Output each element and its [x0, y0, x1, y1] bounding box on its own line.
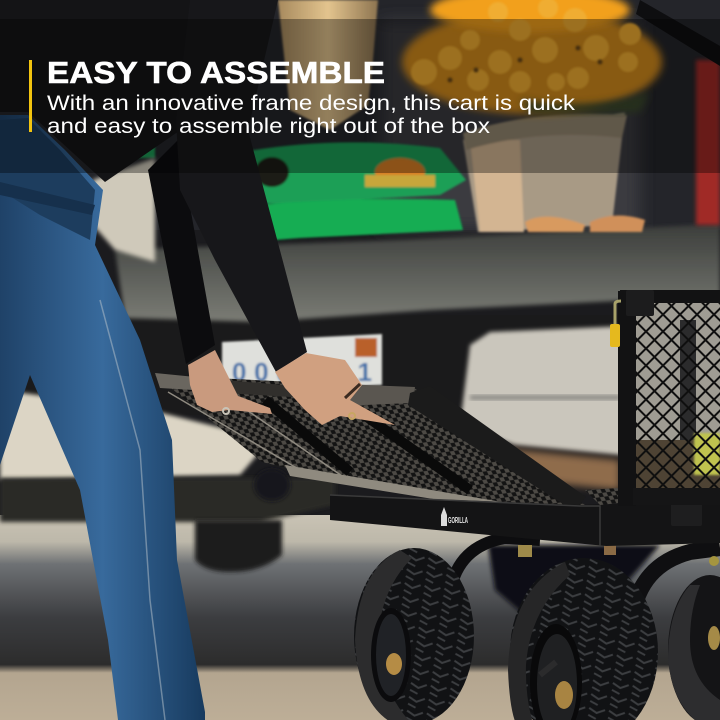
cart bed frame [330, 488, 720, 546]
yellow latch [610, 301, 621, 347]
brand logo [441, 507, 468, 526]
mesh ramp panel [155, 373, 586, 518]
under truck [0, 478, 335, 522]
tailgate ledge [115, 224, 720, 322]
chrysanthemum flowers [402, 0, 662, 114]
translucent dark title band [0, 19, 720, 173]
bracket [671, 494, 702, 526]
black shirt torso [0, 0, 195, 182]
cart wheels [354, 548, 720, 720]
description: and easy to assemble right out of the box [47, 114, 490, 138]
driveway [0, 515, 720, 720]
wheel: left [354, 548, 474, 720]
top right handle [636, 0, 720, 66]
description: With an innovative frame design, this cart is quick [47, 91, 575, 115]
brand logo: GORILLA [448, 516, 468, 525]
panel right frame [408, 386, 586, 511]
white bag behind person [93, 158, 155, 262]
right white bumper [460, 322, 720, 470]
wheel: center [508, 558, 658, 720]
left white bumper [0, 390, 270, 480]
panel lower lip [285, 465, 560, 518]
truck tire [195, 520, 282, 572]
flower pot [463, 112, 645, 232]
accent bar [29, 60, 32, 132]
truck bumper shadow [0, 315, 720, 415]
title: EASY TO ASSEMBLE [47, 55, 385, 90]
panel front frame [155, 373, 226, 392]
hair [278, 0, 378, 130]
fenders and axle shadow [450, 538, 720, 620]
jeans [0, 115, 205, 720]
license plate [222, 334, 382, 392]
wheel: right [668, 575, 720, 720]
panel divider bars [265, 400, 470, 490]
license plate: 0001 01 [232, 357, 372, 387]
red tail light [696, 60, 720, 225]
side cage [610, 290, 720, 506]
green soil bags [110, 138, 466, 242]
black sleeves [148, 0, 307, 372]
hands [188, 350, 395, 425]
